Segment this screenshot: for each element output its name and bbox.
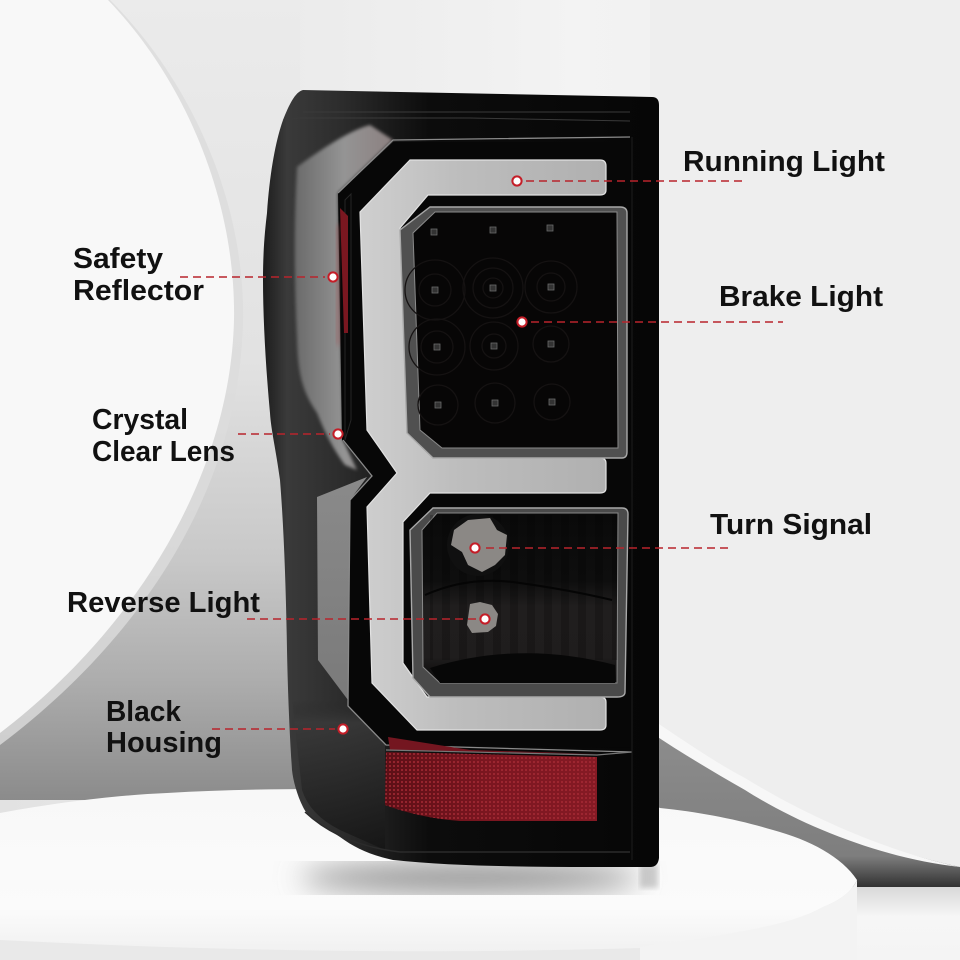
tail light	[263, 90, 659, 867]
callout: running light: Running Light	[683, 146, 885, 178]
callout: black housing: Black	[106, 696, 182, 728]
podium	[0, 789, 857, 960]
callout: reverse light: Reverse Light	[67, 587, 260, 619]
callout: brake light: Brake Light	[719, 281, 883, 313]
turn signal and reverse lens	[410, 508, 628, 697]
safety reflector	[336, 208, 348, 345]
callout: brake light	[517, 281, 883, 327]
callout: black housing	[106, 696, 348, 759]
callout: turn signal: Turn Signal	[710, 509, 872, 541]
callout: safety reflector	[73, 243, 338, 307]
upper clear lens	[295, 125, 393, 470]
lower clear lens	[317, 477, 367, 700]
callout: running light	[512, 146, 885, 186]
turn signal bulb	[447, 514, 509, 576]
callout: crystal clear lens: Clear Lens	[92, 436, 235, 468]
running light tube	[360, 160, 606, 730]
callout: crystal clear lens: Crystal	[92, 404, 188, 436]
callout: reverse light	[67, 587, 490, 624]
callout: crystal clear lens	[92, 404, 343, 468]
callout: turn signal	[470, 509, 872, 553]
reverse bulb	[467, 602, 498, 633]
callout: safety reflector: Safety	[73, 243, 163, 275]
callout: safety reflector: Reflector	[73, 275, 204, 307]
brake light	[400, 207, 627, 458]
callout: black housing: Housing	[106, 727, 222, 759]
red reflector	[385, 737, 632, 821]
lamp cavity	[338, 142, 632, 748]
black housing	[263, 90, 659, 867]
